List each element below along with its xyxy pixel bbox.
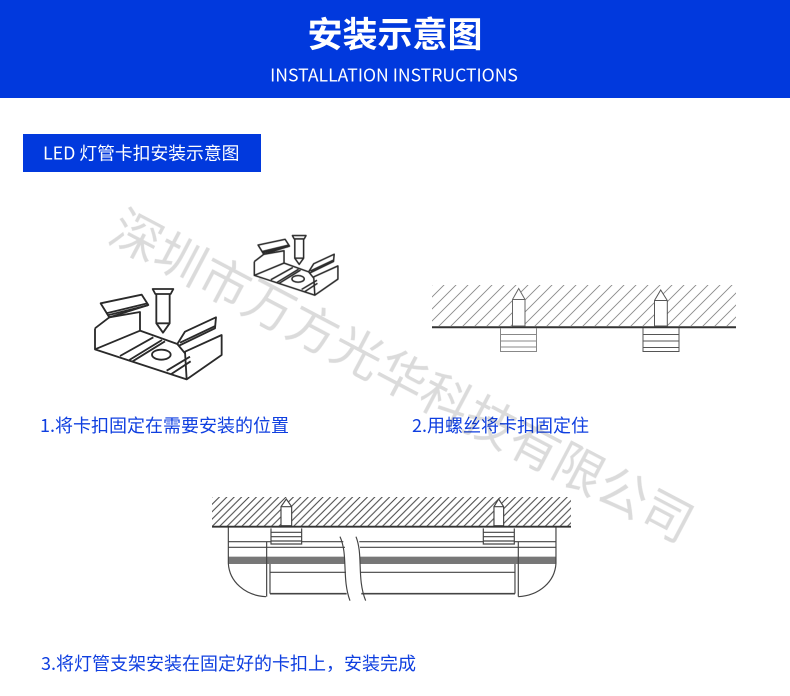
screw 1 xyxy=(512,288,525,326)
watermark: 深圳市万方光华科技有限公司 xyxy=(99,190,708,557)
section heading: LED 灯管卡扣安装示意图 xyxy=(43,140,239,166)
title: 安装示意图 xyxy=(307,7,483,58)
subtitle: INSTALLATION INSTRUCTIONS xyxy=(270,62,518,88)
caption 2: 2.用螺丝将卡扣固定住 xyxy=(412,412,589,438)
clip 2 xyxy=(643,328,679,352)
screw 2 xyxy=(654,290,667,326)
clip right xyxy=(483,528,514,544)
caption 3: 3.将灯管支架安装在固定好的卡扣上，安装完成 xyxy=(41,650,416,676)
header banner xyxy=(0,0,790,98)
screw left xyxy=(281,499,292,526)
caption 1: 1.将卡扣固定在需要安装的位置 xyxy=(40,412,289,438)
clip left xyxy=(271,528,302,544)
illustration: clips and screws xyxy=(95,236,338,379)
section heading xyxy=(23,134,261,172)
icon: small clip xyxy=(254,236,338,295)
illustration: tube mounted on clips xyxy=(212,497,571,601)
clip 1 xyxy=(500,328,536,352)
illustration: screwed clips on ceiling xyxy=(432,285,736,352)
screw right xyxy=(494,499,504,526)
led tube xyxy=(228,527,556,601)
icon: large clip xyxy=(95,289,222,379)
